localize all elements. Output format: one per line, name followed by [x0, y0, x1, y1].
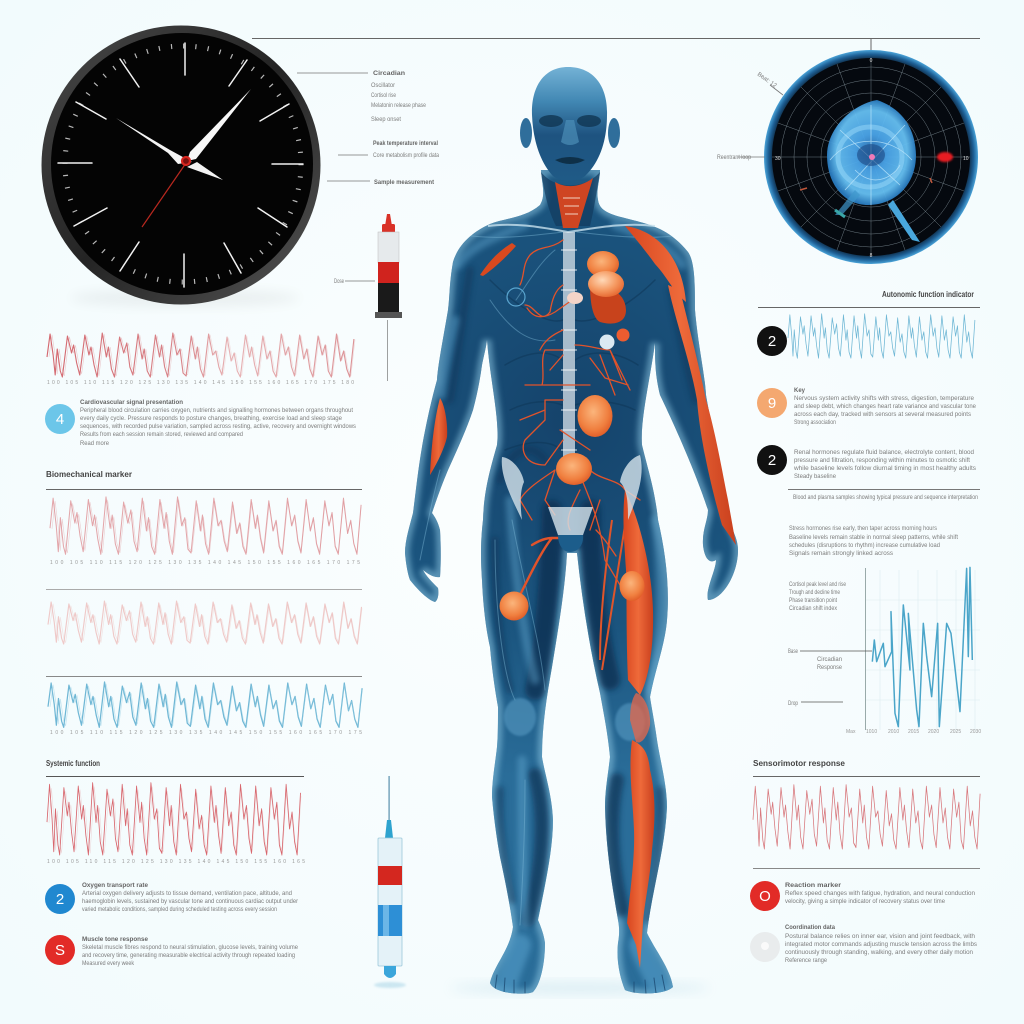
- heading: lower right section: Sensorimotor response: [753, 759, 846, 768]
- clock callouts: Sample measurement: [374, 180, 434, 186]
- callout: orange badge: Key: [794, 388, 806, 394]
- text block: chart notes: Stress hormones rise early, then taper across morning hours: [789, 526, 937, 532]
- organ: left thigh node: [500, 592, 528, 620]
- callout: grey badge right: continuously through standing, walking, and every other daily motion: [785, 950, 973, 956]
- callout: blue badge: Arterial oxygen delivery adjusts to tissue demand, ventilation pace, altitude, and: [82, 891, 292, 897]
- callout: blue badge: 2: [56, 891, 64, 908]
- organ: abdominal mass: [578, 395, 612, 437]
- note: rule and caption: Blood and plasma samples showing typical pressure and sequence interpretation: [793, 495, 978, 501]
- chart: hormone line chart: [788, 567, 981, 735]
- callout: cyan badge: every daily cycle. Pressure responds to posture changes, breathing, exercise load and sleep stage: [80, 416, 343, 422]
- right arm muscle: [625, 226, 736, 545]
- callout: grey badge right: Coordination data: [785, 925, 836, 931]
- text block: chart notes: Cortisol peak level and rise: [789, 582, 847, 588]
- radar scope: 10: [963, 156, 969, 162]
- callout: cyan badge: Peripheral blood circulation carries oxygen, nutrients and signalling hormones between organs throughout: [80, 408, 353, 414]
- kneecaps: [504, 698, 536, 736]
- badge: black 1: [757, 326, 787, 356]
- callout: black badge: pressure and filtration, responding within minutes to osmotic shift: [794, 458, 970, 464]
- callout: black badge: Renal hormones regulate fluid balance, electrolyte content, blood: [794, 450, 974, 456]
- callout: grey badge right: integrated motor commands adjusting muscle tension across the limbs: [785, 942, 977, 948]
- chart: waveform 2: [50, 497, 361, 566]
- left shoulder muscle: [480, 243, 516, 276]
- chart: waveform 4: [48, 682, 362, 736]
- light muscle bands: [441, 225, 682, 925]
- right leg muscle: [600, 490, 654, 968]
- clock callouts: Oscillator: [371, 83, 395, 89]
- vial: Dose: [334, 279, 344, 285]
- pelvic bowl: [558, 535, 583, 552]
- text block: chart notes: schedules (disruptions to rhythm) increase cumulative load: [789, 543, 940, 549]
- chart: hormone line chart: Max: [846, 729, 856, 735]
- callout: cyan badge: [45, 400, 356, 447]
- callout: red badge right: Reflex speed changes with fatigue, hydration, and neural conduction: [785, 891, 975, 897]
- callout: blue badge: [45, 883, 298, 914]
- chart: hormone line chart: 2020: [928, 729, 939, 735]
- callout: orange badge: across each day, tracked with sensors at several measured points: [794, 412, 971, 418]
- callout: orange badge: [757, 388, 977, 426]
- badge: black 1: 2: [768, 333, 776, 350]
- body silhouette: [405, 170, 738, 994]
- text block: chart notes: Trough and decline time: [789, 590, 841, 596]
- organ: pelvic mass: [556, 453, 592, 485]
- clock callouts: [297, 71, 440, 186]
- chart: waveform 6: [788, 314, 975, 358]
- text block: chart notes: Signals remain strongly linked across: [789, 551, 893, 557]
- organ: right thigh node: [620, 571, 644, 601]
- clock callouts: Sleep onset: [371, 117, 401, 123]
- callout: red badge: and recovery time, generating measurable electrical activity through repeated loading: [82, 953, 295, 959]
- callout: red badge right: [750, 881, 975, 911]
- chart: waveform 5: [47, 783, 305, 865]
- callout: orange badge: 9: [768, 395, 776, 412]
- callout: red badge right: Reaction marker: [785, 883, 842, 889]
- callout: grey badge right: [750, 925, 977, 964]
- radar scope: 0: [870, 58, 873, 64]
- dark muscle masses: [535, 510, 610, 690]
- chart: hormone line chart: Response: [817, 665, 843, 671]
- radar scope: 30: [775, 156, 781, 162]
- chart: waveform 5: 100 105 110 115 120 125 130 135 140 145 150 155 160 165: [47, 859, 305, 865]
- chart: hormone line chart: Circadian: [817, 657, 842, 663]
- callout: cyan badge: Read more: [80, 441, 110, 447]
- clock callouts: Circadian: [373, 71, 405, 77]
- callout: red badge: Skeletal muscle fibres respond to neural stimulation, glucose levels, training volume: [82, 945, 299, 951]
- chart: waveform 1: 100 105 110 115 120 125 130 135 140 145 150 155 160 165 170 175 180: [47, 380, 354, 386]
- collar bones: [488, 225, 655, 232]
- chart: hormone line chart: Base: [788, 649, 798, 655]
- callout: black badge: Steady baseline: [794, 474, 837, 480]
- callout: orange badge: Strong association: [794, 420, 836, 426]
- chart: waveform 1: [47, 333, 355, 386]
- chart: hormone line chart: Drop: [788, 701, 799, 707]
- chart: hormone line chart: 2015: [908, 729, 919, 735]
- text block: chart notes: Phase transition point: [789, 598, 837, 604]
- left forearm muscle: [430, 398, 447, 475]
- floor shadow: [450, 982, 710, 994]
- pelvic bones: [502, 455, 642, 535]
- clock callouts: Peak temperature interval: [373, 141, 438, 147]
- clock callouts: Melatonin release phase: [371, 103, 427, 109]
- scope small markers: [835, 210, 845, 217]
- callout: blue badge: Oxygen transport rate: [82, 883, 149, 889]
- callout: cyan badge: sequences, with recorded pulse variation, sampled across resting, active, recovery and overnight windows: [80, 424, 356, 430]
- human body figure: [405, 67, 738, 994]
- red vessel network: [520, 240, 640, 595]
- callout: orange badge: Nervous system activity shifts with stress, digestion, temperature: [794, 396, 975, 402]
- callout: cyan badge: Cardiovascular signal presentation: [80, 400, 183, 406]
- callout: grey badge right: Postural balance relies on inner ear, vision and joint feedback, with: [785, 934, 975, 940]
- vial: [334, 214, 402, 318]
- text block: chart notes: Baseline levels remain stable in normal sleep patterns, while shift: [789, 535, 958, 541]
- organ: red node: [616, 328, 630, 342]
- radar callouts: Reentrant loop: [717, 155, 752, 161]
- callout: black badge: [757, 445, 976, 480]
- clock callouts: Cortisol rise: [371, 93, 397, 99]
- callout: blue badge: varied metabolic conditions, sampled during scheduled testing across every session: [82, 907, 277, 913]
- head: [520, 67, 620, 180]
- scope scan blob: [827, 100, 920, 242]
- scope red signal: [937, 152, 953, 162]
- callout: red badge right: velocity, giving a simple indicator of recovery status over time: [785, 899, 946, 905]
- organ: lung marker: [507, 288, 525, 306]
- clock: [42, 26, 320, 307]
- neck vessels: [541, 172, 600, 228]
- text block: chart notes: [789, 526, 958, 612]
- callout: black badge: while baseline levels follow diurnal timing in most healthy adults: [793, 466, 976, 472]
- heading: right section: Autonomic function indicator: [882, 290, 974, 299]
- syringe: [374, 776, 406, 988]
- chart: waveform 3: [48, 601, 362, 644]
- organ: heart: [567, 251, 626, 324]
- callout: cyan badge: Results from each session remain stored, reviewed and compared: [80, 432, 243, 438]
- chart: hormone line chart: 2030: [970, 729, 981, 735]
- callout: grey badge right: Reference range: [785, 958, 828, 964]
- heading: left section: Biomechanical marker: [46, 470, 132, 479]
- callout: red badge: Measured every week: [82, 961, 135, 967]
- radar scope: 8: [870, 253, 873, 259]
- radar callouts: [717, 72, 783, 161]
- text block: chart notes: Circadian shift index: [789, 606, 837, 612]
- chart: hormone line chart: 1010: [866, 729, 877, 735]
- chart: hormone line chart: 2025: [950, 729, 961, 735]
- chart: waveform 4: 100 105 110 115 120 125 130 135 140 145 150 155 160 165 170 175: [50, 730, 362, 736]
- clock hands: [116, 89, 251, 227]
- callout: black badge: 2: [768, 452, 776, 469]
- chart: hormone line chart: 2010: [888, 729, 899, 735]
- muscle shading: [405, 170, 738, 994]
- callout: orange badge: and sleep debt, which changes heart rate variance and vascular tone: [794, 404, 977, 410]
- callout: blue badge: haemoglobin levels, sustained by vascular tone and continuous cardiac output under: [82, 899, 298, 905]
- organ: white node: [600, 334, 614, 350]
- top rule: [252, 38, 980, 50]
- soft outer edge glow: [405, 170, 738, 994]
- spine: [561, 232, 577, 472]
- radar scope: [764, 50, 978, 264]
- heading: lower left section: Systemic function: [46, 759, 100, 768]
- callout: red badge right: O: [759, 888, 771, 905]
- callout: red badge: S: [55, 942, 65, 959]
- radar callouts: Beat: 12: [756, 72, 778, 90]
- callout: red badge: Muscle tone response: [82, 937, 149, 943]
- chart: waveform 2: 100 105 110 115 120 125 130 135 140 145 150 155 160 165 170 175: [50, 560, 360, 566]
- chart: waveform 7: [753, 785, 980, 849]
- callout: cyan badge: 4: [56, 411, 64, 428]
- clock callouts: Core metabolism profile data: [373, 153, 440, 159]
- callout: red badge: [45, 935, 299, 967]
